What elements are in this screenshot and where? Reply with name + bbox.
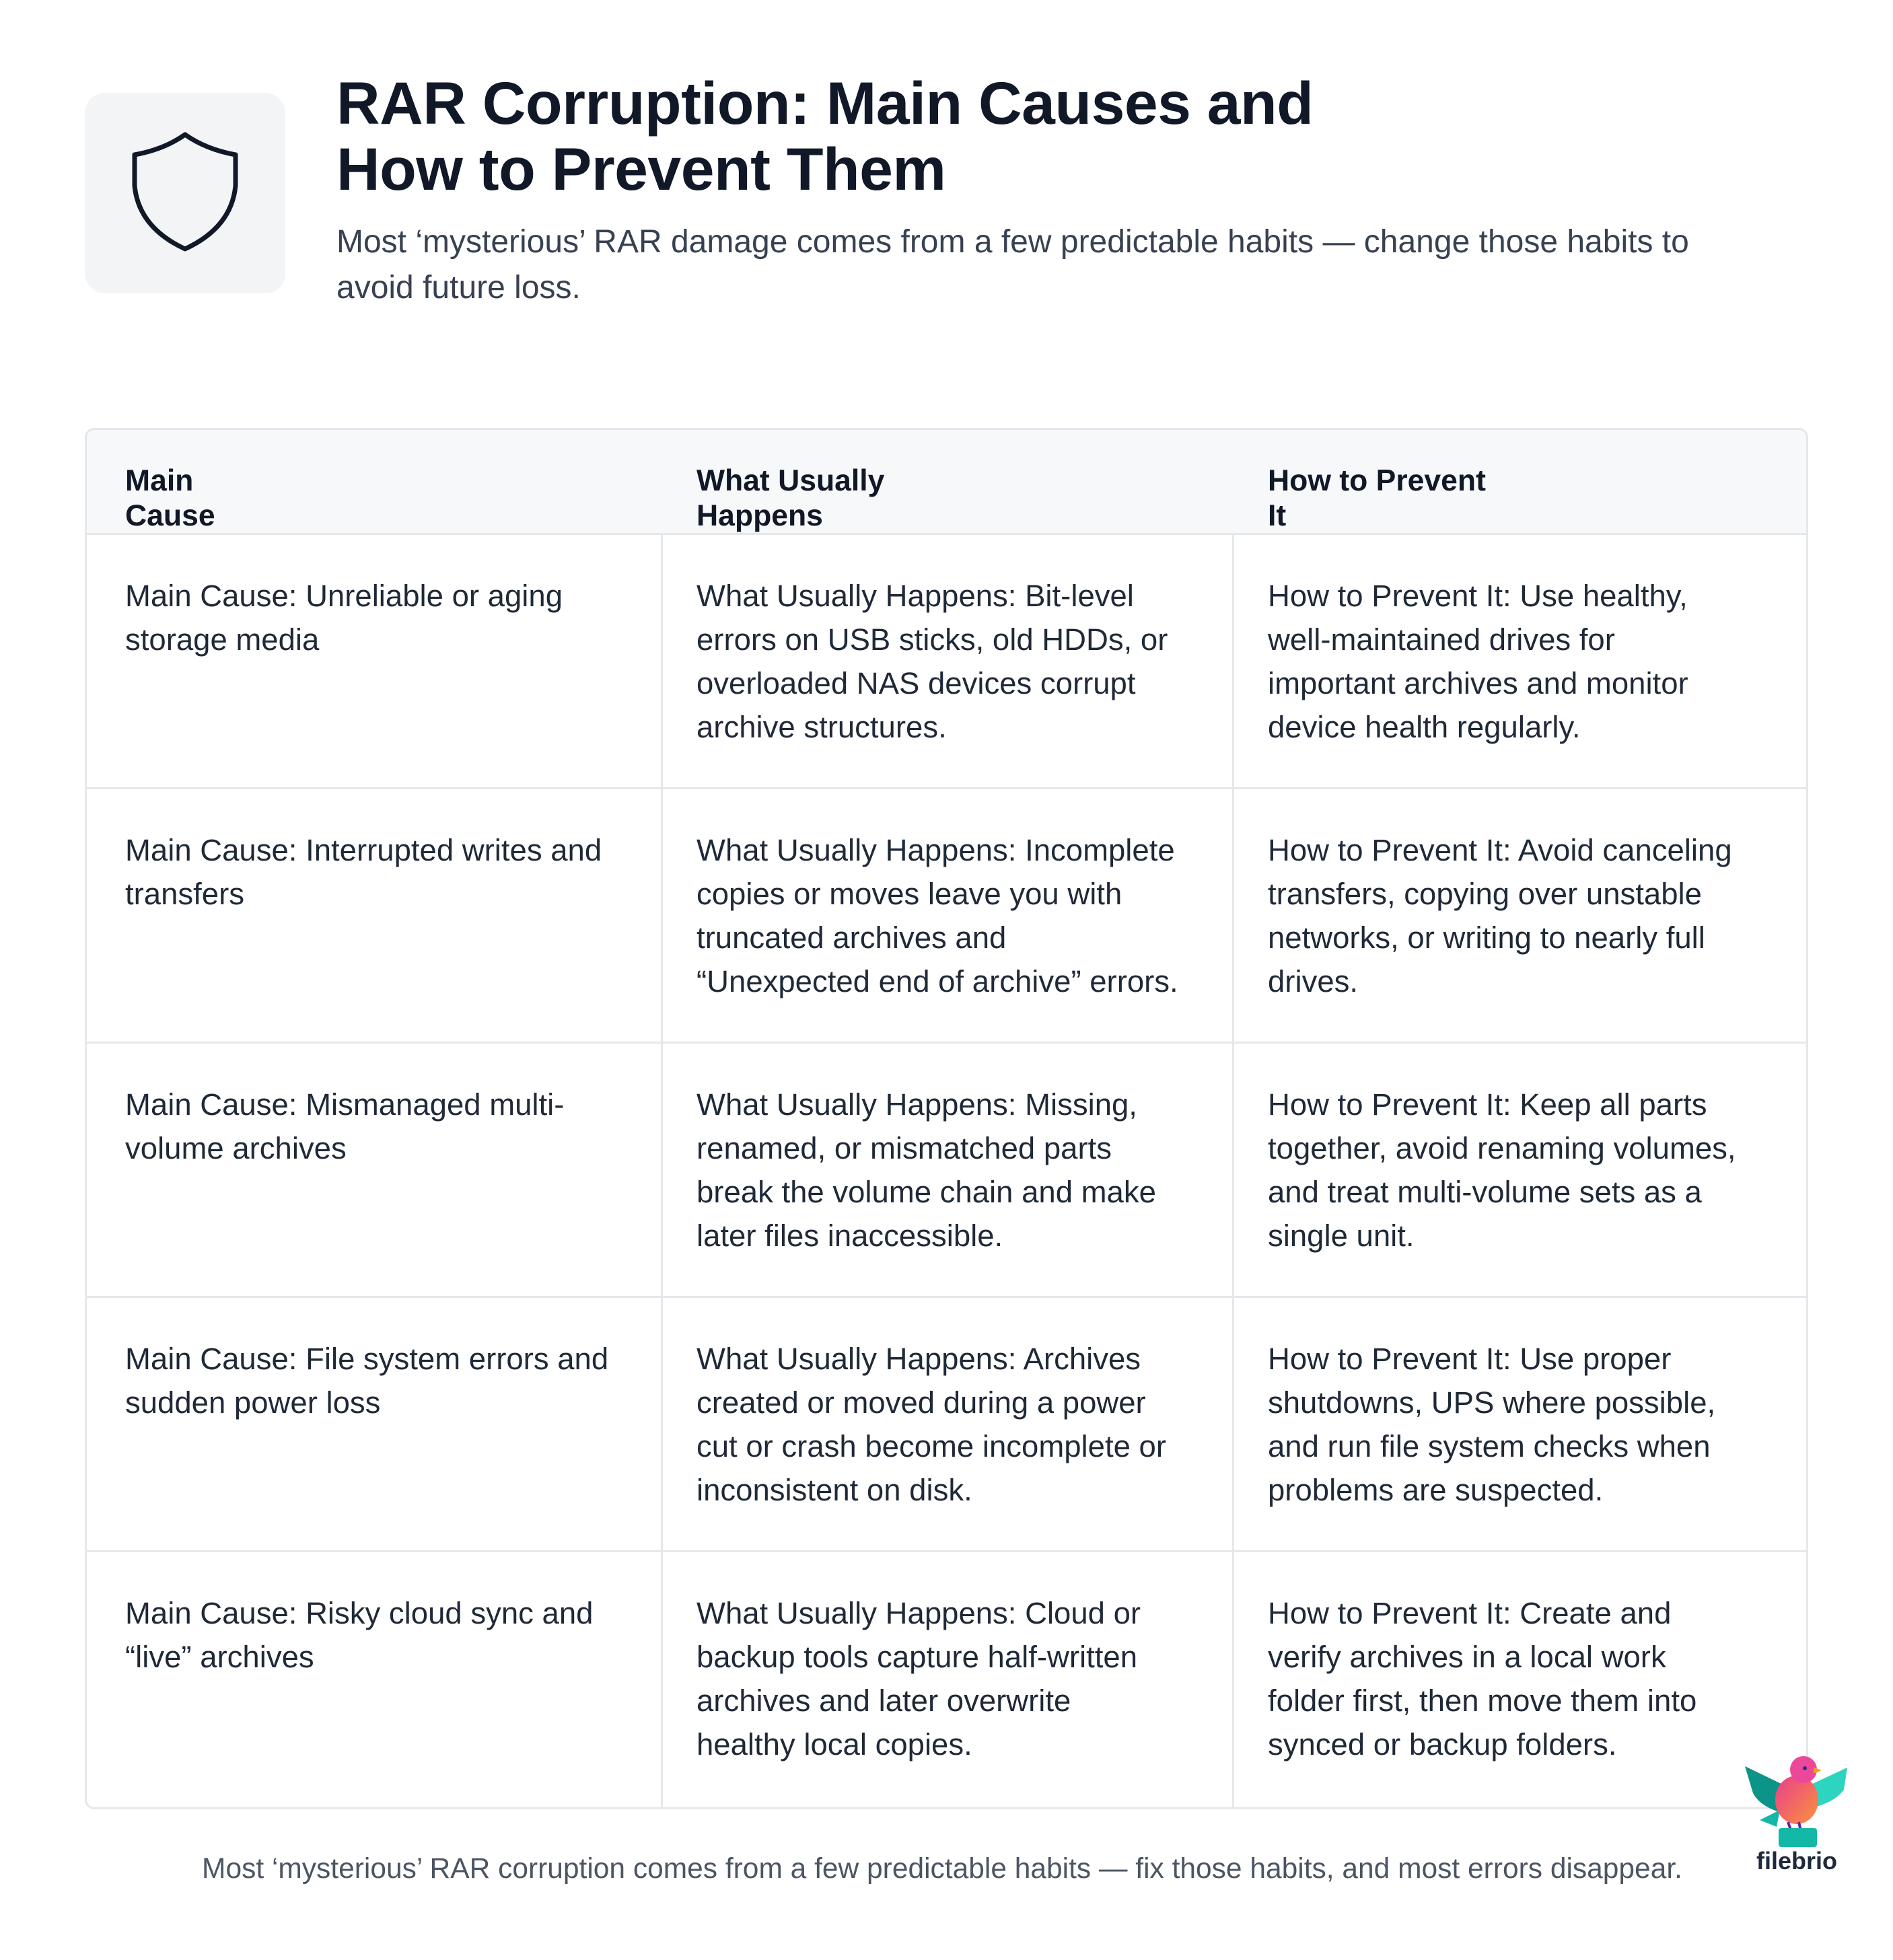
- table header: It: [1268, 499, 1286, 532]
- row 1: Main Cause: Unreliable or aging: [125, 579, 563, 613]
- subtitle: Most ‘mysterious’ RAR damage comes from a few predictable habits — change those habits to: [336, 224, 1689, 260]
- subtitle: [336, 224, 1689, 305]
- row 1: overloaded NAS devices corrupt: [697, 666, 1136, 700]
- row 4: created or moved during a power: [697, 1385, 1146, 1420]
- row 1: What Usually Happens: Bit-level: [697, 579, 1134, 613]
- row 3: volume archives: [125, 1131, 347, 1165]
- row 1: important archives and monitor: [1268, 666, 1688, 700]
- title: RAR Corruption: Main Causes and: [336, 69, 1313, 137]
- row 2: Main Cause: Interrupted writes and: [125, 833, 602, 867]
- table header: Happens: [697, 499, 823, 532]
- footer note: Most ‘mysterious’ RAR corruption comes from a few predictable habits — fix those habits, and most errors disappear.: [202, 1853, 1682, 1885]
- table: [85, 428, 1808, 1809]
- row 2: networks, or writing to nearly full: [1268, 920, 1705, 955]
- row 5: “live” archives: [125, 1640, 314, 1674]
- row 4: Main Cause: File system errors and: [125, 1342, 608, 1376]
- row 3: renamed, or mismatched parts: [697, 1131, 1112, 1165]
- row 3: later files inaccessible.: [697, 1219, 1003, 1253]
- logo: filebrio: [1745, 1756, 1847, 1875]
- row 2: drives.: [1268, 964, 1358, 999]
- row 3: and treat multi-volume sets as a: [1268, 1175, 1702, 1209]
- icon: shield: [85, 93, 285, 293]
- row 4: shutdowns, UPS where possible,: [1268, 1385, 1715, 1420]
- row 2: transfers: [125, 877, 244, 911]
- row 5: backup tools capture half-written: [697, 1640, 1137, 1674]
- row 5: [125, 1596, 1696, 1762]
- row 3: How to Prevent It: Keep all parts: [1268, 1087, 1707, 1122]
- row 5: archives and later overwrite: [697, 1683, 1071, 1718]
- row 1: [87, 535, 1806, 789]
- row 4: sudden power loss: [125, 1385, 380, 1420]
- table header: Main: [125, 464, 193, 497]
- row 4: cut or crash become incomplete or: [697, 1429, 1166, 1463]
- row 1: How to Prevent It: Use healthy,: [1268, 579, 1688, 613]
- row 2: truncated archives and: [697, 920, 1006, 955]
- row 4: How to Prevent It: Use proper: [1268, 1342, 1671, 1376]
- row 2: [87, 789, 1806, 1044]
- row 5: folder first, then move them into: [1268, 1683, 1696, 1718]
- row 3: [87, 1044, 1806, 1298]
- row 4: [87, 1298, 1806, 1552]
- row 5: What Usually Happens: Cloud or: [697, 1596, 1141, 1630]
- title: How to Prevent Them: [336, 135, 946, 203]
- row 5: How to Prevent It: Create and: [1268, 1596, 1671, 1630]
- row 1: storage media: [125, 622, 319, 657]
- row 3: single unit.: [1268, 1219, 1415, 1253]
- row 5: healthy local copies.: [697, 1727, 972, 1762]
- row 2: What Usually Happens: Incomplete: [697, 833, 1175, 867]
- row 2: transfers, copying over unstable: [1268, 877, 1702, 911]
- row 4: inconsistent on disk.: [697, 1473, 972, 1507]
- logo: filebrio: filebrio: [1756, 1847, 1837, 1875]
- row 3: What Usually Happens: Missing,: [697, 1087, 1137, 1122]
- table header: [87, 430, 1806, 535]
- table header: How to Prevent: [1268, 464, 1486, 497]
- row 1: device health regularly.: [1268, 710, 1581, 744]
- title: [336, 69, 1313, 203]
- row 2: How to Prevent It: Avoid canceling: [1268, 833, 1732, 867]
- row 1: errors on USB sticks, old HDDs, or: [697, 622, 1168, 657]
- row 1: archive structures.: [697, 710, 947, 744]
- row 3: together, avoid renaming volumes,: [1268, 1131, 1736, 1165]
- row 2: copies or moves leave you with: [697, 877, 1122, 911]
- row 4: and run file system checks when: [1268, 1429, 1711, 1463]
- row 4: problems are suspected.: [1268, 1473, 1603, 1507]
- row 3: break the volume chain and make: [697, 1175, 1156, 1209]
- row 5: synced or backup folders.: [1268, 1727, 1616, 1762]
- table header: Cause: [125, 499, 215, 532]
- row 5: verify archives in a local work: [1268, 1640, 1666, 1674]
- row 2: “Unexpected end of archive” errors.: [697, 964, 1178, 999]
- row 3: Main Cause: Mismanaged multi-: [125, 1087, 564, 1122]
- row 5: Main Cause: Risky cloud sync and: [125, 1596, 593, 1630]
- table header: What Usually: [697, 464, 884, 497]
- row 4: What Usually Happens: Archives: [697, 1342, 1141, 1376]
- subtitle: avoid future loss.: [336, 270, 581, 305]
- row 1: well-maintained drives for: [1268, 622, 1615, 657]
